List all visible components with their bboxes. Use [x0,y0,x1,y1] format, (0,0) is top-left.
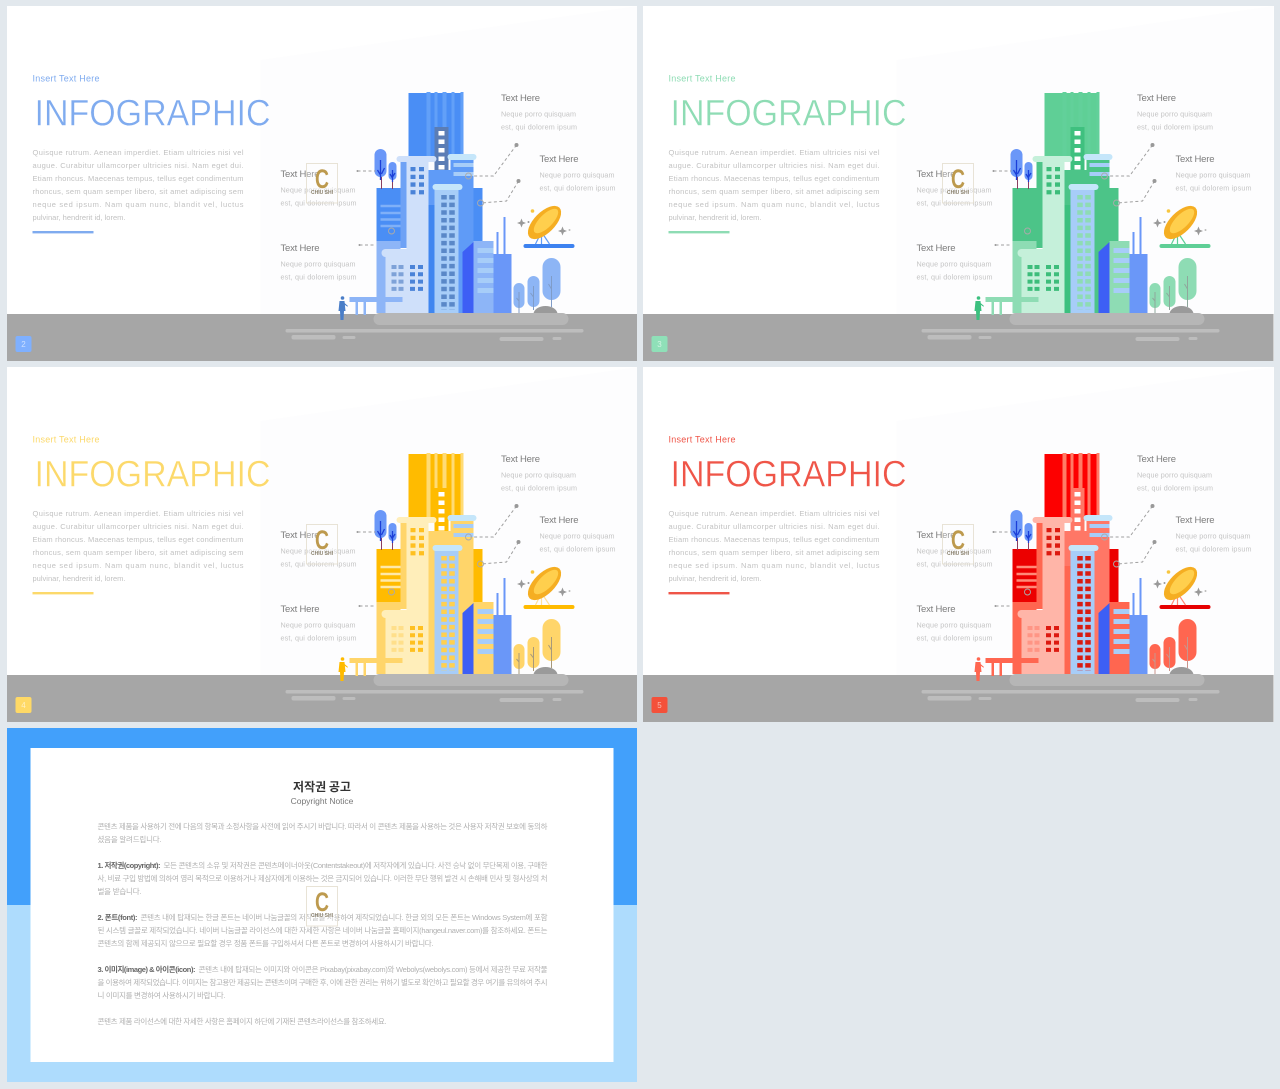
callout: top right: Text Here [500,93,540,104]
section: image and icon: 니 이미지를 변경하여 사용하시기 바랍니다. [97,990,225,1000]
callout: top right: Neque porro quisquam [500,110,576,118]
building cluster [1012,92,1148,313]
page number badge [15,336,31,352]
accent underline [668,592,730,594]
callout: top right: Text Here [500,454,540,465]
watermark badge: C [314,887,328,917]
body paragraph: Etiam rhoncus. Maecenas tempus, tellus eget condimentum [32,535,243,544]
watermark badge [306,164,337,203]
body paragraph: pulvinar, hendrerit id, lorem. [668,213,762,222]
section: copyright: 모든 콘텐츠의 소유 및 저작권은 콘텐츠메이너아웃(Contentstakeout)에 저작자에게 있습니다. 사전 승낙 없이 무단복제 이용, 구매한 [163,860,547,870]
base platform [1010,313,1204,325]
callout: lower left: Neque porro quisquam [916,260,992,268]
callout: upper left: est, qui dolorem ipsum [916,560,992,568]
watermark badge: C [314,525,328,555]
callout: upper left: Text Here [916,169,956,180]
body paragraph: neque sed ipsum. Nam quam nunc, blandit vel, luctus [32,561,243,570]
section: copyright: 벌을 받습니다. [97,886,141,896]
title: INFOGRAPHIC [34,452,270,494]
right trees [1150,619,1196,675]
callout: middle right: est, qui dolorem ipsum [1176,544,1252,554]
callout: upper left [280,169,356,208]
body paragraph: rhoncus, sem quam semper libero, sit amet adipiscing sem [668,187,880,196]
callout: middle right: est, qui dolorem ipsum [539,184,615,192]
watermark badge: CHIU SHI [947,551,970,557]
section: image and icon: 을 이용하여 제작되었습니다. 이미지는 참고용만 제공되는 콘텐츠이며 구매한 후, 이에 관한 권리는 위하기 별도로 확인하고 필요할 경우 여기를 유의하여 주시 [97,977,547,987]
callout: top right: est, qui dolorem ipsum [500,484,576,492]
body paragraph: augue. Curabitur ullamcorper ultricies nisi. Nam eget dui. [32,522,243,531]
section: image and icon: 콘텐츠 내에 탑재되는 이미지와 아이콘은 Pixabay(pixabay.com)와 Webolys(webolys.com) 등에서 제공한 무료 저작물 [198,964,547,974]
title: INFOGRAPHIC [34,92,270,134]
base platform [1010,674,1204,686]
body paragraph: neque sed ipsum. Nam quam nunc, blandit vel, luctus [32,200,243,209]
callout: upper left: Text Here [916,530,956,541]
callout: upper left: est, qui dolorem ipsum [280,560,356,568]
callout: middle right [1176,515,1252,554]
callout: lower left: est, qui dolorem ipsum [280,634,356,642]
ground details [285,329,583,341]
intro text [97,821,547,844]
panel: yellow infographic [6,367,637,722]
body paragraph: rhoncus, sem quam semper libero, sit amet adipiscing sem [32,187,243,196]
body paragraph: Etiam rhoncus. Maecenas tempus, tellus eget condimentum [668,174,880,183]
panel: copyright notice [7,728,637,1082]
callout: upper left: Neque porro quisquam [916,186,992,194]
body paragraph: augue. Curabitur ullamcorper ultricies nisi. Nam eget dui. [668,161,880,170]
panel: green infographic [643,6,1274,361]
panel: blue infographic [6,6,637,361]
ground details [285,690,583,702]
callout leader lines [356,143,520,246]
watermark badge [306,524,337,564]
page number badge: 5 [657,701,662,710]
callout: top right: est, qui dolorem ipsum [1137,122,1213,132]
callout: upper left: Text Here [280,169,319,180]
section: font: 콘텐츠의 함께 제공되지 않으므로 필요할 경우 정품 폰트를 구입하셔서 다른 폰트로 변경하여 사용하시기 바랍니다. [97,938,433,948]
callout: upper left: Neque porro quisquam [280,186,355,194]
callout: upper left [916,169,992,208]
notice title: 저작권 공고 [293,778,350,795]
callout: top right: Text Here [1137,93,1176,104]
callout: middle right: est, qui dolorem ipsum [1176,184,1252,192]
page number badge: 3 [657,340,662,349]
person [974,657,984,681]
callout: middle right: Neque porro quisquam [1176,170,1250,180]
watermark badge: CHIU SHI [311,913,333,919]
intro text: 콘텐츠 제품을 사용하기 전에 다음의 항목과 소정사항을 사전에 읽어 주시기 바랍니다. 따라서 이 콘텐츠 제품을 사용하는 것은 사용자 저작권 보호에 동의하 [97,821,547,831]
callout: upper left: Text Here [280,530,319,541]
body paragraph: Quisque rutrum. Aenean imperdiet. Etiam ultricies nisi vel [668,148,880,157]
heading label: Insert Text Here [32,74,99,84]
callout: top right: Neque porro quisquam [1137,110,1212,118]
heading label: Insert Text Here [668,74,736,84]
bench [986,658,1038,676]
callout: lower left: Neque porro quisquam [280,260,355,268]
callout: middle right: Neque porro quisquam [539,532,614,540]
callout: lower left: Text Here [280,243,319,254]
callout: top right: Text Here [1137,454,1176,465]
page number badge [15,697,31,713]
callout: middle right [539,515,615,554]
watermark badge [306,886,337,926]
body paragraph [668,509,880,583]
callout: lower left: est, qui dolorem ipsum [916,634,992,642]
callout: middle right: Neque porro quisquam [539,170,614,180]
heading label: Insert Text Here [668,434,736,444]
body paragraph [32,509,243,583]
closing line: 콘텐츠 제품 라이선스에 대한 자세한 사항은 홈페이지 하단에 기재된 콘텐츠라이선스를 참조하세요. [97,1016,386,1026]
callout: lower left: Text Here [916,604,956,615]
satellite dish [516,561,574,609]
callout: lower left [916,243,992,282]
heading label: Insert Text Here [32,434,99,444]
callout: top right: Neque porro quisquam [1137,470,1212,480]
callout: lower left [916,604,992,642]
right trees [1150,258,1196,314]
callout: upper left: est, qui dolorem ipsum [916,198,992,208]
callout: upper left [280,530,356,568]
intro text: 셨음을 알려드립니다. [97,834,161,844]
body paragraph: rhoncus, sem quam semper libero, sit amet adipiscing sem [668,548,880,557]
body paragraph: pulvinar, hendrerit id, lorem. [668,574,762,583]
callout: upper left: Neque porro quisquam [280,546,355,556]
person [338,657,348,681]
notice subtitle: Copyright Notice [290,796,353,806]
building cluster [376,92,511,313]
body paragraph: pulvinar, hendrerit id, lorem. [32,213,125,222]
callout leader lines [356,504,520,607]
watermark badge: CHIU SHI [947,190,970,196]
callout: top right: Neque porro quisquam [500,470,576,480]
bench [349,658,402,676]
callout: top right [500,454,576,492]
body paragraph: Quisque rutrum. Aenean imperdiet. Etiam ultricies nisi vel [668,509,880,518]
accent underline [32,231,93,233]
callout: lower left: est, qui dolorem ipsum [916,272,992,282]
person [974,296,984,320]
body paragraph: Quisque rutrum. Aenean imperdiet. Etiam ultricies nisi vel [32,148,243,157]
callout: middle right [539,154,615,192]
callout: middle right [1176,154,1252,192]
section: copyright [97,860,547,896]
callout: upper left: est, qui dolorem ipsum [280,198,356,208]
body paragraph: Etiam rhoncus. Maecenas tempus, tellus eget condimentum [668,535,880,544]
body paragraph: rhoncus, sem quam semper libero, sit amet adipiscing sem [32,548,243,557]
watermark badge: CHIU SHI [311,551,333,557]
satellite dish [1153,561,1210,609]
bench [349,297,402,315]
callout: lower left [280,604,356,642]
body paragraph: neque sed ipsum. Nam quam nunc, blandit vel, luctus [668,200,880,209]
callout: middle right: Text Here [539,154,578,165]
callout: lower left: est, qui dolorem ipsum [280,272,356,282]
section: copyright: 1. 저작권(copyright): [97,860,160,870]
building cluster [376,453,511,674]
panel: red infographic [643,367,1274,722]
section: image and icon: 3. 이미지(image) & 아이콘(icon): [97,964,195,974]
section: font: 된 시스템 글꼴로 제작되었습니다. 네이버 나눔글꼴 라이선스에 대한 자세한 사항은 네이버 나눔글꼴 홈페이지(hangeul.naver.com)를 참조하세요. 폰트는 [97,925,547,935]
watermark badge: C [951,525,965,555]
page number badge: 4 [21,701,26,710]
callout: lower left: Neque porro quisquam [916,620,992,630]
callout: lower left: Neque porro quisquam [280,620,355,630]
callout: middle right: Text Here [1176,515,1214,526]
right trees [513,258,560,314]
callout: top right: est, qui dolorem ipsum [500,122,576,132]
body paragraph: augue. Curabitur ullamcorper ultricies nisi. Nam eget dui. [32,161,243,170]
bench [986,297,1038,315]
callout: top right [1137,93,1213,132]
watermark badge [942,524,974,564]
callout: lower left [280,243,356,282]
body paragraph [668,148,880,222]
body paragraph: Etiam rhoncus. Maecenas tempus, tellus eget condimentum [32,174,243,183]
callout: lower left: Text Here [280,604,319,615]
watermark badge: CHIU SHI [311,190,333,196]
section: image and icon [97,964,547,1000]
base platform [373,313,568,325]
section: copyright: 사, 비료 구입 방법에 의하여 영리 목적으로 이용하거나 제삼자에게 이용하는 것은 금지되어 있습니다. 이러한 무단 행위 발견 시 손해배 민사 및 형사상의 처 [97,873,547,883]
accent underline [32,592,93,594]
left trees [374,510,396,550]
page number badge [652,336,668,352]
body paragraph: neque sed ipsum. Nam quam nunc, blandit vel, luctus [668,561,880,570]
page number badge [652,697,668,713]
callout: upper left: Neque porro quisquam [916,546,992,556]
person [338,296,348,320]
left trees [374,149,396,189]
left trees [1010,510,1032,550]
body paragraph [32,148,243,222]
body paragraph: pulvinar, hendrerit id, lorem. [32,574,125,583]
ground details [922,690,1220,702]
callout: top right [500,93,576,132]
watermark badge: C [951,164,965,194]
callout: middle right: est, qui dolorem ipsum [539,544,615,554]
building cluster [1012,453,1148,674]
page number badge: 2 [21,340,26,349]
callout leader lines [992,504,1156,607]
body paragraph: augue. Curabitur ullamcorper ultricies nisi. Nam eget dui. [668,522,880,531]
callout leader lines [992,143,1156,246]
body paragraph: Quisque rutrum. Aenean imperdiet. Etiam ultricies nisi vel [32,509,243,518]
satellite dish [516,200,574,248]
section: font [97,912,547,948]
watermark badge [942,164,974,203]
callout: top right [1137,454,1213,492]
callout: top right: est, qui dolorem ipsum [1137,484,1213,492]
right trees [513,619,560,675]
callout: middle right: Neque porro quisquam [1176,532,1250,540]
callout: upper left [916,530,992,568]
callout: lower left: Text Here [916,243,956,254]
accent underline [668,231,730,233]
title: INFOGRAPHIC [670,92,906,134]
title: INFOGRAPHIC [670,452,906,494]
base platform [373,674,568,686]
callout: middle right: Text Here [1176,154,1214,165]
section: font: 2. 폰트(font): [97,913,137,922]
section: font: 콘텐츠 내에 탑재되는 한글 폰트는 네이버 나눔글꼴의 저작물을 사용하여 제작되었습니다. 한글 외의 모든 폰트는 Windows System에 포함 [140,912,547,922]
ground details [922,329,1220,341]
left trees [1010,149,1032,189]
satellite dish [1153,200,1210,248]
callout: middle right: Text Here [539,515,578,526]
watermark badge: C [314,164,328,194]
